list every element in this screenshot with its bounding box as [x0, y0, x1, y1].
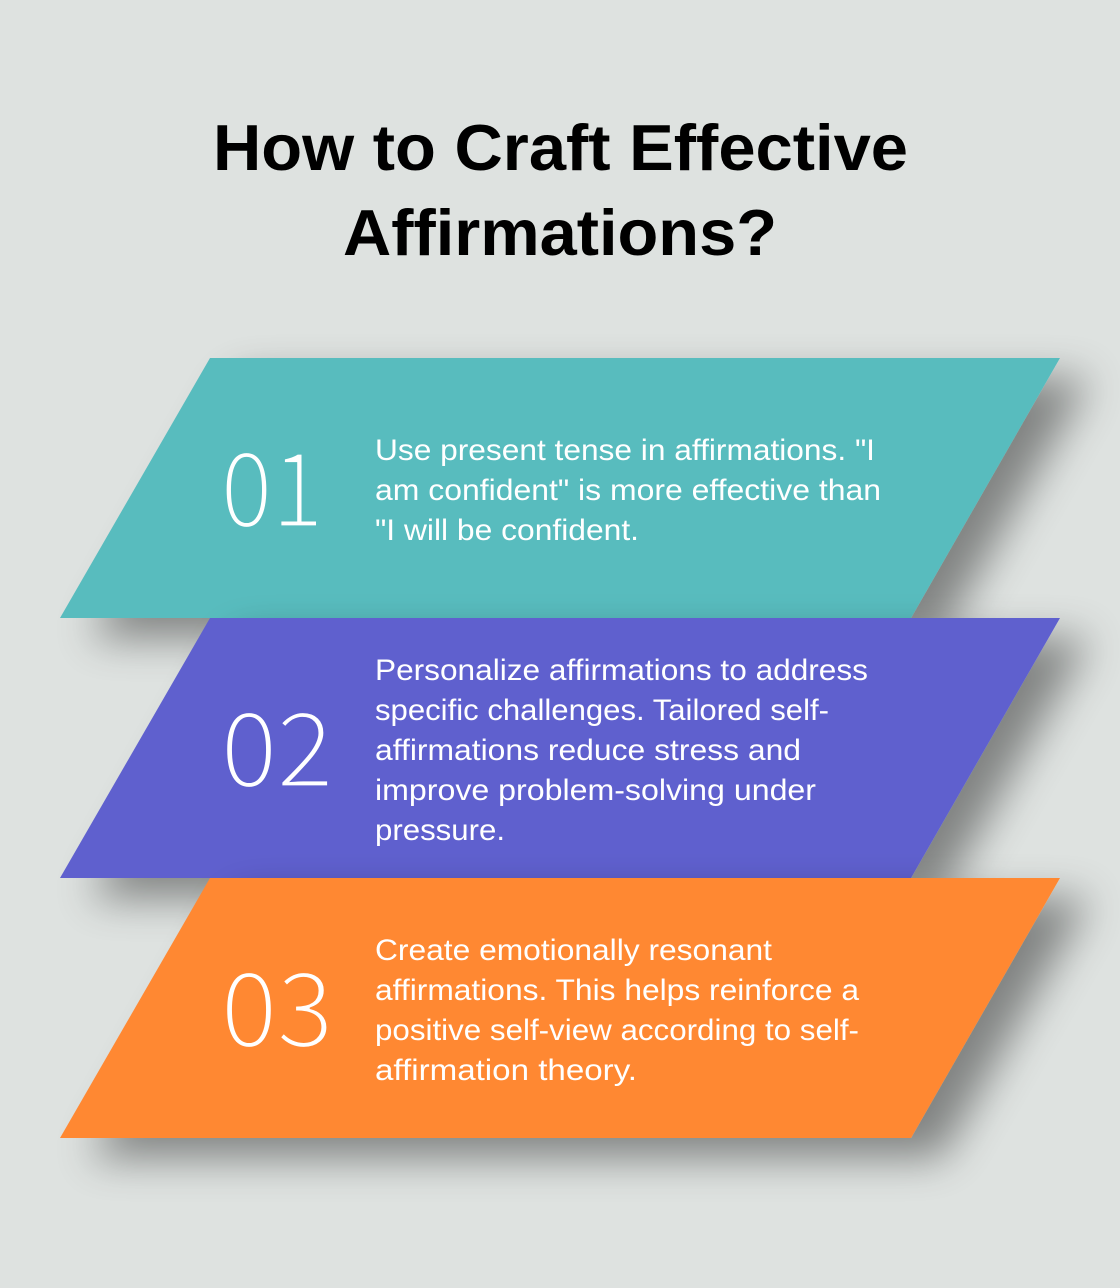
text: step 03 description: Create emotionally resonant: [375, 934, 773, 967]
text: step 03 description: [375, 934, 859, 1087]
title: How to Craft Effective: [213, 111, 908, 184]
number: 01: 01: [221, 409, 323, 556]
band: step 02 shape: [60, 618, 1060, 878]
band: step 03 shape: [60, 878, 1060, 1138]
title: Affirmations?: [343, 196, 777, 269]
title: [213, 111, 908, 269]
text: step 03 description: affirmations. This helps reinforce a: [375, 974, 859, 1007]
panel: step 02: [60, 618, 1060, 878]
panel: step 01: [60, 358, 1060, 618]
text: step 03 description: affirmation theory.: [375, 1054, 637, 1087]
number: 02: 02: [221, 669, 333, 816]
text: step 01 description: Use present tense in affirmations. "I: [375, 434, 875, 467]
text: step 02 description: specific challenges. Tailored self-: [375, 694, 829, 727]
text: step 02 description: pressure.: [375, 814, 505, 847]
text: step 02 description: Personalize affirmations to address: [375, 654, 868, 687]
text: step 02 description: [375, 654, 868, 847]
text: step 01 description: am confident" is more effective than: [375, 474, 881, 507]
number: 03: 03: [221, 929, 333, 1076]
text: step 02 description: affirmations reduce stress and: [375, 734, 801, 767]
text: step 02 description: improve problem-solving under: [375, 774, 816, 807]
text: step 01 description: "I will be confident.: [375, 514, 639, 547]
panel: step 03: [60, 878, 1060, 1138]
text: step 03 description: positive self-view according to self-: [375, 1014, 859, 1047]
band: step 01 shape: [60, 358, 1060, 618]
text: step 01 description: [375, 434, 881, 547]
